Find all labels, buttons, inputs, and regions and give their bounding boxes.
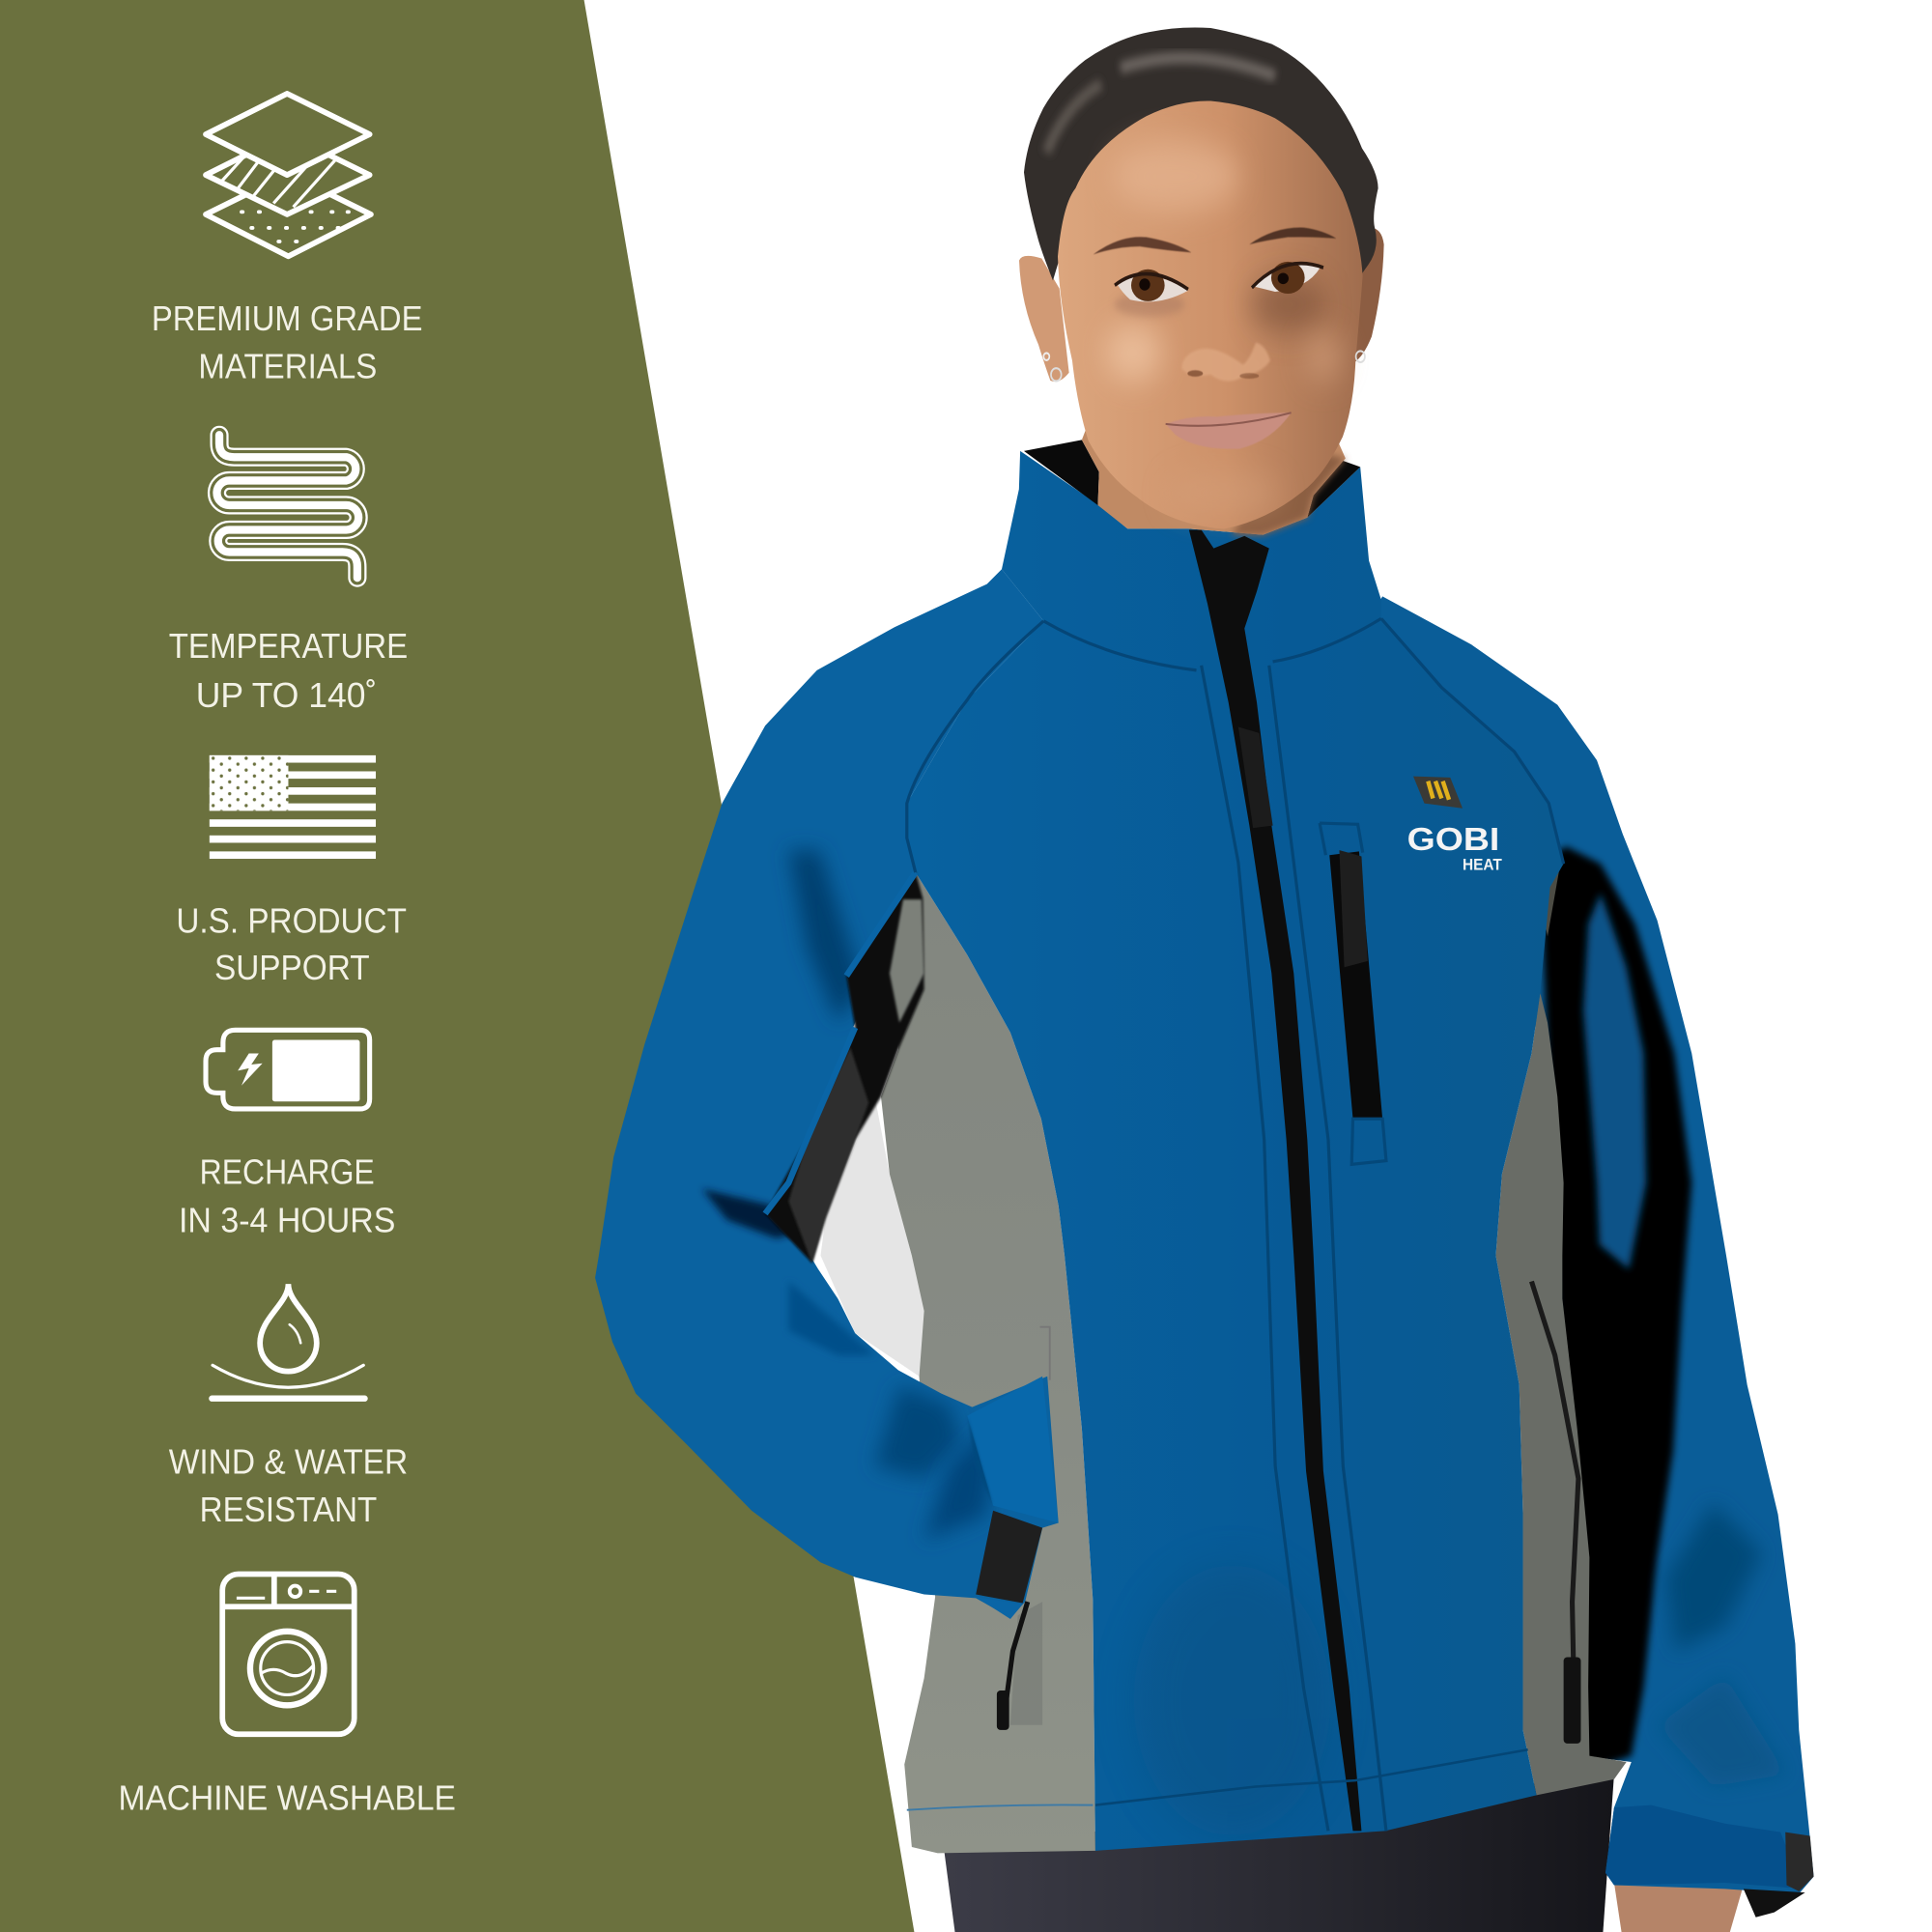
left cuff tail bbox=[976, 1597, 1023, 1619]
arm seams bbox=[765, 872, 916, 1213]
underarm lower lining bbox=[788, 1047, 868, 1263]
neck bbox=[1082, 370, 1346, 535]
left eye bbox=[1118, 275, 1188, 301]
photo: woman wearing blue heated jacket bbox=[595, 28, 1814, 1932]
right grey side panel bbox=[1495, 993, 1627, 1795]
feature: us product support bbox=[176, 755, 407, 987]
label: wind and water resistant bbox=[169, 1443, 408, 1529]
placket seams bbox=[1202, 666, 1386, 1831]
label: recharge in 3-4 hours: RECHARGE bbox=[200, 1153, 375, 1192]
lips bbox=[1166, 412, 1292, 449]
main zipper bbox=[1189, 529, 1361, 1831]
trousers bbox=[944, 1775, 1614, 1932]
right hand bbox=[1614, 1883, 1744, 1932]
chest pocket bbox=[1320, 823, 1386, 1164]
label: machine washable: MACHINE WASHABLE bbox=[118, 1779, 456, 1818]
label: temperature up to 140 bbox=[169, 627, 408, 715]
light grey gap between arm and torso bbox=[820, 1096, 926, 1377]
raglan and collar seams bbox=[907, 618, 1564, 872]
label: wind and water resistant: RESISTANT bbox=[200, 1491, 377, 1529]
earrings bbox=[1043, 353, 1049, 360]
feature: premium grade materials bbox=[152, 94, 423, 386]
icon: heating coil bbox=[216, 435, 358, 578]
left ear bbox=[1019, 256, 1069, 382]
upper right grey sliver bbox=[1531, 863, 1560, 936]
left grey side panel bbox=[881, 872, 1095, 1853]
Gobi Heat logo: HEAT bbox=[1463, 856, 1502, 874]
label: recharge in 3-4 hours bbox=[179, 1153, 395, 1240]
right side zipper bbox=[1531, 1282, 1580, 1744]
label: premium grade materials: MATERIALS bbox=[198, 348, 377, 386]
feature: wind and water resistant bbox=[169, 1284, 408, 1529]
icon: washing machine bbox=[222, 1574, 355, 1734]
label: temperature up to 140: TEMPERATURE bbox=[169, 627, 408, 666]
underarm shadow bbox=[765, 872, 924, 1263]
hem stitch left bbox=[907, 1804, 1093, 1810]
label: us product support: U.S. PRODUCT bbox=[176, 902, 407, 941]
right sleeve bbox=[1355, 596, 1814, 1918]
face bbox=[1058, 100, 1363, 529]
icon: american flag bbox=[210, 755, 376, 859]
label: premium grade materials bbox=[152, 299, 423, 386]
label: us product support: SUPPORT bbox=[214, 949, 370, 987]
collar black lining bbox=[1024, 440, 1099, 505]
left sleeve bbox=[595, 569, 1059, 1618]
Gobi Heat logo bbox=[1407, 822, 1502, 874]
green slanted panel bbox=[0, 0, 914, 1932]
zipper pull bbox=[1238, 727, 1273, 828]
body shading bbox=[1146, 1583, 1313, 1821]
eyebrows bbox=[1094, 237, 1191, 254]
label: premium grade materials: PREMIUM GRADE bbox=[152, 299, 423, 338]
hair bbox=[1024, 28, 1378, 280]
left pocket and zipper pull bbox=[997, 1327, 1050, 1730]
left cuff velcro bbox=[976, 1511, 1042, 1603]
label: wind and water resistant: WIND & WATER bbox=[169, 1443, 408, 1482]
icon: battery bbox=[206, 1030, 370, 1109]
panel: feature list bbox=[118, 94, 456, 1818]
face shading bbox=[1104, 325, 1162, 381]
right eye bbox=[1254, 265, 1321, 292]
nose bbox=[1181, 343, 1270, 382]
feature: recharge bbox=[179, 1030, 395, 1240]
label: temperature up to 140: UP TO 140˚ bbox=[196, 676, 377, 715]
feature: temperature bbox=[169, 435, 408, 715]
label: recharge in 3-4 hours: IN 3-4 HOURS bbox=[179, 1202, 395, 1240]
icon: water drop on surface bbox=[212, 1284, 365, 1399]
label: us product support bbox=[176, 902, 407, 987]
right cuff bbox=[1605, 1805, 1802, 1888]
Gobi Heat logo: GOBI bbox=[1407, 822, 1499, 858]
jacket body bbox=[907, 451, 1564, 1851]
eye socket left bbox=[1114, 293, 1185, 317]
cuff velcro tab bbox=[1785, 1833, 1814, 1891]
icon: fabric layers bbox=[206, 94, 371, 256]
head bbox=[1019, 28, 1384, 529]
heat controller button bbox=[1413, 777, 1463, 809]
right ear bbox=[1354, 228, 1384, 362]
hem stitch body bbox=[1095, 1749, 1528, 1805]
left cuff bbox=[967, 1377, 1059, 1523]
feature: machine washable bbox=[118, 1574, 456, 1818]
